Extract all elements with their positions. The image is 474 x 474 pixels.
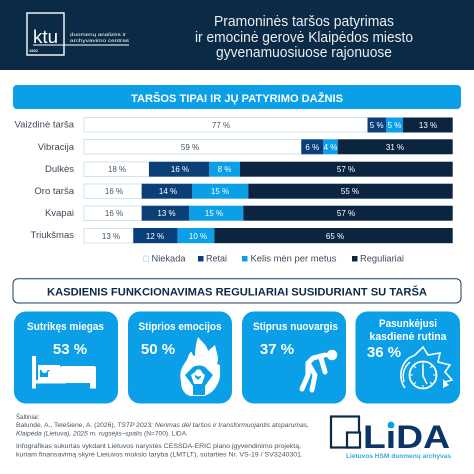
sources text: Šaltiniai:	[16, 414, 40, 421]
row: Oro tarša	[34, 184, 453, 199]
legend: Kelis mėn per metus	[250, 254, 337, 264]
icon: flame with head in hands	[180, 337, 220, 396]
card: emotions	[128, 312, 232, 404]
title: ir emocinė gerovė Klaipėdos miesto	[195, 29, 413, 46]
row: Oro tarša: 55 %	[341, 187, 359, 196]
row: Triukšmas: 10 %	[189, 232, 207, 241]
sources text: Klaipėda (Lietuva), 2025 m. rugsėjis–spalis (N=700). LiDA.	[16, 430, 188, 438]
LiDA logo: Lietuvos HSM duomenų archyvas	[346, 453, 452, 460]
row: Triukšmas: 13 %	[102, 232, 120, 241]
card: routine: 36 %	[367, 344, 401, 361]
KTU logo	[27, 13, 130, 55]
title: Pramoninės taršos patyrimas	[214, 13, 394, 30]
row: Triukšmas: Triukšmas	[31, 230, 74, 241]
icon: clock with burst	[401, 347, 452, 388]
row: Triukšmas: 65 %	[326, 232, 344, 241]
title	[195, 13, 413, 61]
row: Oro tarša: 15 %	[211, 187, 229, 196]
sources text: kuriam finansavimą skyrė Lietuvos mokslo taryba (LMTLT), sutarties Nr. VS-19 / SV3240301.	[16, 452, 303, 458]
section heading: daily functioning	[13, 279, 461, 303]
row: Kvapai: 15 %	[205, 209, 223, 218]
row: Dulkės: Dulkės	[45, 164, 74, 175]
row: Kvapai: 13 %	[157, 209, 176, 218]
sources text: Infografikas sukurtas vykdant Lietuvos narystės CESSDA-ERIC plano įgyvendinimo projektą,	[16, 443, 301, 450]
KTU logo: duomenų analizės ir	[70, 32, 127, 38]
row: Dulkės: 18 %	[108, 165, 126, 174]
card: sleep: Sutrikęs miegas	[27, 321, 104, 333]
section heading: daily functioning: KASDIENIS FUNKCIONAVIMAS REGULIARIAI SUSIDURIANT SU TARŠA	[47, 286, 427, 298]
row: Kvapai: 16 %	[105, 209, 123, 218]
row: Triukšmas	[31, 228, 453, 243]
row: Vibracija: Vibracija	[38, 142, 75, 153]
header band	[0, 0, 474, 70]
row: Dulkės	[45, 162, 453, 177]
row: Oro tarša: Oro tarša	[34, 186, 75, 197]
LiDA logo: LiDA	[363, 419, 450, 455]
legend: Retai	[206, 254, 227, 264]
row: Triukšmas: 12 %	[146, 232, 164, 241]
row: Vaizdinė tarša: 5 %	[388, 121, 401, 130]
row: Vibracija: 6 %	[305, 143, 319, 152]
card: routine: kasdienė rutina	[370, 331, 447, 343]
card: fatigue: 37 %	[260, 341, 294, 358]
row: Dulkės: 57 %	[337, 165, 355, 174]
row: Dulkės: 8 %	[218, 165, 231, 174]
legend: Niekada	[152, 254, 186, 264]
card: sleep: 53 %	[53, 341, 87, 358]
legend: Reguliariai	[360, 254, 404, 264]
card: fatigue: Stiprus nuovargis	[253, 321, 338, 333]
card: sleep	[14, 312, 118, 404]
card: emotions: 50 %	[141, 341, 175, 358]
row: Kvapai	[45, 206, 453, 221]
row: Vibracija: 4 %	[324, 143, 337, 152]
LiDA logo	[331, 416, 452, 460]
row: Vibracija: 31 %	[386, 143, 404, 152]
row: Dulkės: 16 %	[171, 165, 189, 174]
row: Vaizdinė tarša: Vaizdinė tarša	[14, 120, 75, 130]
stacked bar chart	[14, 118, 453, 243]
section heading: pollution types	[13, 85, 461, 109]
row: Kvapai: Kvapai	[45, 208, 74, 219]
card: emotions: Stiprios emocijos	[138, 321, 222, 333]
row: Vibracija	[38, 139, 453, 154]
row: Vaizdinė tarša	[14, 118, 453, 132]
KTU logo: archyvavimo centras	[70, 38, 130, 44]
section heading: pollution types: TARŠOS TIPAI IR JŲ PATYRIMO DAŽNIS	[131, 92, 343, 105]
KTU logo: ktu	[33, 27, 58, 47]
icon: bed	[32, 356, 96, 388]
row: Vaizdinė tarša: 5 %	[370, 121, 384, 130]
card: routine	[356, 312, 460, 404]
title: gyvenamuosiuose rajonuose	[216, 44, 392, 61]
row: Oro tarša: 14 %	[159, 187, 177, 196]
row: Vibracija: 59 %	[181, 143, 199, 152]
sources text: Balunde, A., Telešiene, A. (2026), TSTP 2023: Nerimas dėl taršos ir transformuojantis atsparumas,	[16, 422, 309, 429]
row: Vaizdinė tarša: 77 %	[212, 121, 230, 130]
icon: tired person	[302, 350, 337, 390]
row: Kvapai: 57 %	[337, 209, 355, 218]
card: routine: Pasunkėjusi	[379, 318, 437, 330]
card: fatigue	[242, 312, 346, 404]
legend	[144, 254, 404, 264]
sources text	[16, 414, 309, 458]
KTU logo: 1922	[29, 48, 39, 53]
row: Oro tarša: 16 %	[105, 187, 123, 196]
row: Vaizdinė tarša: 13 %	[419, 121, 437, 130]
